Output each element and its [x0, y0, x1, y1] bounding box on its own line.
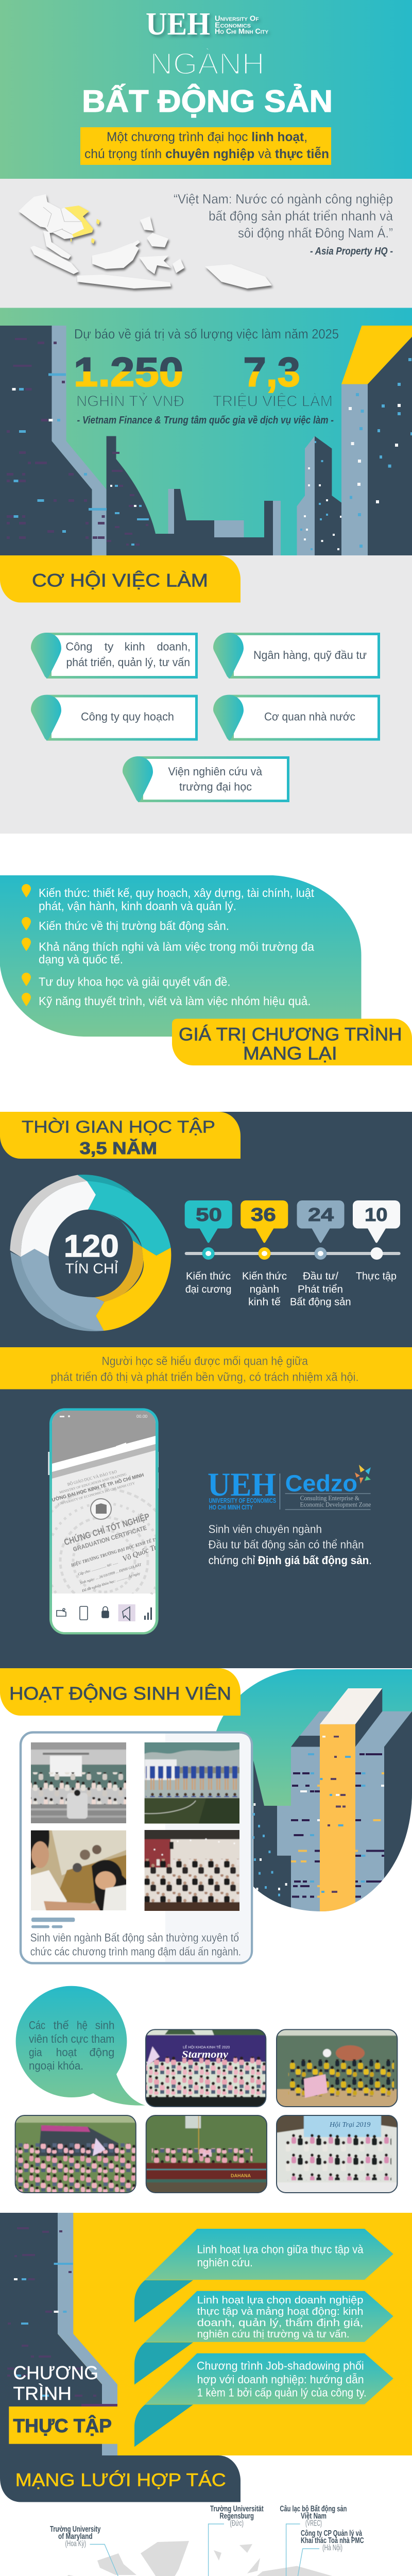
heading tab: CƠ HỘI VIỆC LÀM [32, 570, 208, 590]
logo: UEH: Economics [215, 21, 251, 29]
illustration: tower blob [216, 1669, 412, 1922]
label: University of Maryland: of Maryland [58, 2532, 93, 2541]
label: VREC: (VREC) [305, 2519, 322, 2528]
label: PMC: (Hà Nội) [322, 2544, 342, 2552]
illustration: skyline [0, 326, 412, 556]
callout: speech bubble: sinh [95, 2019, 114, 2031]
photo: Starmony festival: LỄ HỘI KHOA KINH TẾ 2020 [183, 2044, 230, 2049]
heading tab: MANG LẠI [243, 1044, 337, 1064]
marker: 36 credits: ngành [250, 1284, 279, 1295]
yellow statement band: phát triển đô thị và phát triển bền vững, có trách nhiệm xã hội. [50, 1370, 358, 1384]
illustration: phone with certificate [48, 1408, 159, 1634]
bullet list: Kiến thức: thiết kế, quy hoạch, xây dựng, tài chính, luật [39, 886, 315, 900]
label: VREC: Câu lạc bộ Bất động sản [280, 2505, 347, 2513]
chart: world partner map [50, 2505, 364, 2576]
illustration: phone with certificate: Cấp cho: ................. tại: ...... [77, 1560, 118, 1577]
logos: UEH and Cedzo [208, 1465, 371, 1511]
label: University of Maryland [50, 2525, 100, 2548]
photo: Starmony festival: Starmony [182, 2049, 228, 2060]
illustration: phone with certificate: GRADUATION CERTIFICATE [72, 1524, 148, 1553]
illustration: side building [0, 2213, 117, 2455]
illustration: phone with certificate: HIỆU TRƯỞNG TRƯỜNG ĐẠI HỌC KINH TẾ TP [70, 1536, 158, 1568]
donut center label: 120 [64, 1229, 119, 1263]
photo: boat trip [144, 2114, 268, 2194]
logo: UEH: University Of [215, 15, 259, 23]
arrow: flexible choice [134, 2229, 393, 2323]
logos: UEH and Cedzo: UNIVERSITY OF ECONOMICS [209, 1497, 276, 1504]
label: VREC [280, 2505, 347, 2528]
callout: speech bubble: Các [29, 2019, 45, 2031]
marker: 50 credits: đại cương [185, 1284, 232, 1295]
certificate text [209, 1523, 372, 1567]
heading tab [0, 1668, 241, 1716]
label: University of Maryland: Trường University [50, 2525, 100, 2534]
marker: 24 credits: Phát triển [298, 1284, 343, 1295]
card caption: chức các chương trình mang đậm dấu ấn ngành. [30, 1945, 241, 1958]
label: Universität Regensburg: (Đức) [230, 2519, 244, 2528]
bullet list: phát, vận hành, kinh doanh và quản lý. [39, 899, 236, 912]
arrow: flexible employers: thực tập và mảng hoạt động: kinh [197, 2306, 364, 2317]
quote text: “Việt Nam: Nước có ngành công nghiệp [174, 191, 393, 207]
label: PMC [301, 2529, 364, 2552]
certificate text: Sinh viên chuyên ngành [209, 1523, 322, 1535]
marker: 50 credits: 50 [196, 1204, 222, 1225]
decorative text bars [31, 1918, 75, 1928]
marker: 10 credits [353, 1200, 400, 1282]
photo: bus trip [13, 2114, 138, 2194]
panel: student activities [0, 1668, 412, 2194]
subtitle box [80, 127, 331, 165]
panel: activity photo card [21, 1732, 252, 1963]
callout: speech bubble: viên tích cực tham [29, 2032, 114, 2045]
heading tab [0, 1112, 241, 1159]
panel: program value [0, 875, 412, 1065]
logo: UEH [146, 7, 268, 42]
source note: - Vietnam Finance & Trung tâm quốc gia về dịch vụ việc làm - [77, 415, 334, 426]
title: BẤT ĐỘNG SẢN: BẤT ĐỘNG SẢN [82, 84, 333, 118]
panel: internship program [0, 2213, 412, 2455]
photo: 2019 camp: Hội Trại 2019 [329, 2121, 370, 2129]
heading tab [172, 1019, 412, 1065]
logo: UEH: Ho Chi Minh City [215, 27, 268, 36]
phone nav icons [57, 1604, 152, 1621]
photo: evening gathering [143, 1829, 241, 1912]
yellow statement band: Người học sẽ hiểu được mối quan hệ giữa [102, 1354, 308, 1368]
card: business companies: Công [66, 640, 93, 653]
bullet list: Tư duy khoa học và giải quyết vấn đề. [39, 975, 231, 988]
card caption: Sinh viên ngành Bất động sản thường xuyên tổ [30, 1931, 239, 1944]
bullet list: Kiến thức về thị trường bất động sản. [39, 919, 229, 933]
heading: internship: THỰC TẬP [13, 2415, 112, 2436]
marker: 24 credits: Bất động sản [290, 1297, 351, 1308]
heading tab: HOẠT ĐỘNG SINH VIÊN [9, 1683, 231, 1704]
arrow: job shadowing: 1 kèm 1 bởi cấp quản lý của công ty. [197, 2386, 367, 2399]
heading tab [0, 555, 241, 603]
title: NGÀNH: NGÀNH [150, 47, 265, 81]
card: business companies: kinh [125, 640, 145, 653]
arrow: flexible employers: Linh hoạt lựa chọn doanh nghiệp [197, 2295, 364, 2306]
card caption [30, 1931, 241, 1958]
heading tab: THỜI GIAN HỌC TẬP [22, 1117, 215, 1137]
bullet list [39, 886, 315, 1008]
arrow: job shadowing [134, 2353, 393, 2447]
timeline [185, 1200, 401, 1308]
card: business companies: ty [105, 640, 113, 653]
donut center label: TÍN CHỈ [65, 1260, 118, 1277]
stat: 1.250: 1.250 [74, 349, 183, 395]
logo: UEH: UEH [146, 7, 210, 42]
photo: boat trip: DAHANA [231, 2173, 251, 2178]
marker: 36 credits: Kiến thức [242, 1271, 287, 1282]
photo: beach camp [275, 2028, 399, 2108]
stat: 7,3: 7,3 [243, 349, 300, 395]
bullet list: Khả năng thích nghi và làm việc trong môi trường đa [39, 940, 314, 953]
photo: football team [143, 1741, 241, 1825]
arrow: job shadowing: hợp với doanh nghiệp: hướng dẫn [197, 2373, 364, 2386]
photo: 2019 camp [275, 2114, 399, 2194]
logos: UEH and Cedzo: UEH [208, 1466, 276, 1503]
label: Universität Regensburg: Trường Universität [210, 2505, 264, 2513]
illustration: phone with certificate: MINISTRY OF EDUCATION AND TRAINING [59, 1472, 127, 1495]
marker: 50 credits: Kiến thức [186, 1271, 231, 1282]
label: University of Maryland: (Hoa Kỳ) [65, 2539, 86, 2548]
panel: study duration [0, 1112, 412, 1668]
logos: UEH and Cedzo: Economic Development Zone [300, 1500, 371, 1509]
heading tab: partner network [0, 2455, 241, 2502]
quote text: bất động sản phát triển nhanh và [209, 208, 393, 224]
marker: 24 credits: Đầu tư/ [303, 1271, 338, 1282]
callout: speech bubble: động [90, 2046, 114, 2059]
illustration: phone with certificate: CHỨNG CHỈ TỐT NGHIỆP [63, 1511, 151, 1547]
arrow: flexible employers: doanh, quản lý, thẩm định giá, [197, 2317, 364, 2329]
certificate text: Đầu tư bất động sản có thể nhận [209, 1538, 364, 1551]
bullet list: Kỹ năng thuyết trình, viết và làm việc nhóm hiệu quả. [39, 994, 311, 1008]
card: research institutes: Viện nghiên cứu và [168, 765, 263, 778]
callout: speech bubble: thế [54, 2019, 69, 2031]
leader lines [90, 2524, 330, 2576]
bullet list: dạng và quốc tế. [39, 953, 123, 966]
label: PMC: Công ty CP Quản lý và [301, 2529, 362, 2538]
card: business companies: doanh, [157, 640, 191, 653]
marker: 50 credits [185, 1200, 232, 1295]
card: state agencies: Cơ quan nhà nước [264, 710, 355, 723]
card: planning [31, 695, 198, 741]
map: continents [62, 2541, 360, 2576]
arrow: job shadowing: Chương trình Job-shadowing phối [197, 2360, 364, 2372]
stat: 7,3 [213, 349, 333, 410]
callout: speech bubble: ngoại khóa. [29, 2059, 83, 2072]
callout: speech bubble: hoạt [56, 2046, 77, 2059]
callout: speech bubble: hệ [77, 2019, 88, 2031]
photo: Starmony festival [144, 2028, 268, 2108]
illustration: phone with certificate: UNIVERSITY OF ECONOMICS HO CHI MINH CITY [58, 1482, 135, 1506]
certificate text: chứng chỉ Định giá bất động sản. [209, 1554, 372, 1567]
subtitle box: Một chương trình đại học linh hoạt, [107, 130, 307, 144]
heading: internship: TRÌNH [13, 2383, 72, 2404]
yellow statement band [0, 1347, 412, 1389]
heading tab: GIÁ TRỊ CHƯƠNG TRÌNH [179, 1024, 402, 1045]
quote text [174, 191, 393, 257]
heading tab: 3,5 NĂM [80, 1139, 157, 1158]
illustration: phone with certificate: Võ Quốc Tr [122, 1543, 158, 1563]
label: Universität Regensburg [210, 2505, 264, 2528]
forecast heading: Dự báo về giá trị và số lượng việc làm năm 2025 [74, 326, 339, 342]
card: state agencies [213, 695, 380, 741]
label: Universität Regensburg: Regensburg [219, 2512, 254, 2521]
callout: speech bubble: gia [29, 2046, 42, 2059]
stat: 1.250: NGHÌN TỶ VNĐ [76, 393, 184, 410]
marker: 36 credits [241, 1200, 288, 1308]
chart: credits donut [10, 1175, 171, 1331]
marker: 36 credits: kinh tế [248, 1297, 281, 1308]
callout: speech bubble [16, 1986, 145, 2106]
illustration: phone with certificate: 00.00 [136, 1414, 148, 1419]
heading tab: partner network: MẠNG LƯỚI HỢP TÁC [15, 2470, 226, 2490]
marker: 24 credits [290, 1200, 351, 1308]
panel: quote and Southeast Asia map [0, 179, 412, 308]
photo: students handshake [30, 1829, 127, 1911]
card: business companies [31, 633, 198, 679]
label: PMC: Khai thác Toà nhà PMC [301, 2536, 364, 2545]
marker: 10 credits: Thực tập [356, 1271, 397, 1282]
photo: class group [30, 1741, 127, 1824]
card: banks: Ngân hàng, quỹ đầu tư [253, 649, 367, 662]
panel: job opportunities [0, 555, 412, 834]
card: research institutes [123, 756, 289, 802]
donut center label [64, 1229, 119, 1277]
arrow: flexible choice: nghiên cứu. [197, 2256, 253, 2269]
marker: 10 credits: 10 [365, 1204, 387, 1225]
illustration: phone with certificate: Đã tốt nghiệp khóa học: ............. Áp ngày [81, 1571, 141, 1593]
logos: UEH and Cedzo: HO CHI MINH CITY [209, 1503, 253, 1511]
map: Southeast Asia [19, 194, 272, 289]
card: banks [213, 633, 380, 679]
panel: hero [0, 0, 412, 179]
marker: 36 credits: 36 [251, 1204, 276, 1225]
marker: 24 credits: 24 [308, 1204, 334, 1225]
label: VREC: Việt Nam [301, 2512, 327, 2521]
logos: UEH and Cedzo: Consulting Enterprise & [300, 1494, 359, 1502]
subtitle box: chú trọng tính chuyên nghiệp và thực tiễn [84, 146, 329, 161]
arrow: flexible employers [134, 2291, 393, 2384]
arrow: flexible choice: Linh hoạt lựa chọn giữa thực tập và [197, 2243, 364, 2256]
heading: internship [9, 2362, 118, 2444]
card: research institutes: trường đại học [179, 780, 252, 793]
illustration: phone with certificate: Sinh ngày: ... 26/10/1999 ... ĐỊNH GIÁ BẤT [79, 1563, 142, 1585]
quote text: - Asia Property HQ - [310, 246, 393, 257]
illustration: phone with certificate: TRƯỜNG ĐẠI HỌC KINH TẾ TP. HỒ CHÍ MINH [45, 1472, 145, 1505]
stat: 7,3: TRIỆU VIỆC LÀM [213, 393, 333, 410]
heading: internship: CHƯƠNG [13, 2362, 98, 2383]
bullet icons [22, 884, 31, 1006]
illustration: phone with certificate: BỘ GIÁO DỤC VÀ ĐÀO TẠO [67, 1469, 117, 1487]
panel: 2025 forecast with skyline [0, 308, 412, 556]
card: business companies: phát triển, quản lý, tư vấn [66, 656, 190, 669]
arrow: flexible employers: nghiên cứu thị trường và tư vấn. [197, 2329, 350, 2340]
card: planning: Công ty quy hoạch [81, 710, 174, 723]
quote text: sôi động nhất Đông Nam Á.” [238, 225, 393, 241]
logos: UEH and Cedzo: Cedzo [285, 1470, 357, 1497]
